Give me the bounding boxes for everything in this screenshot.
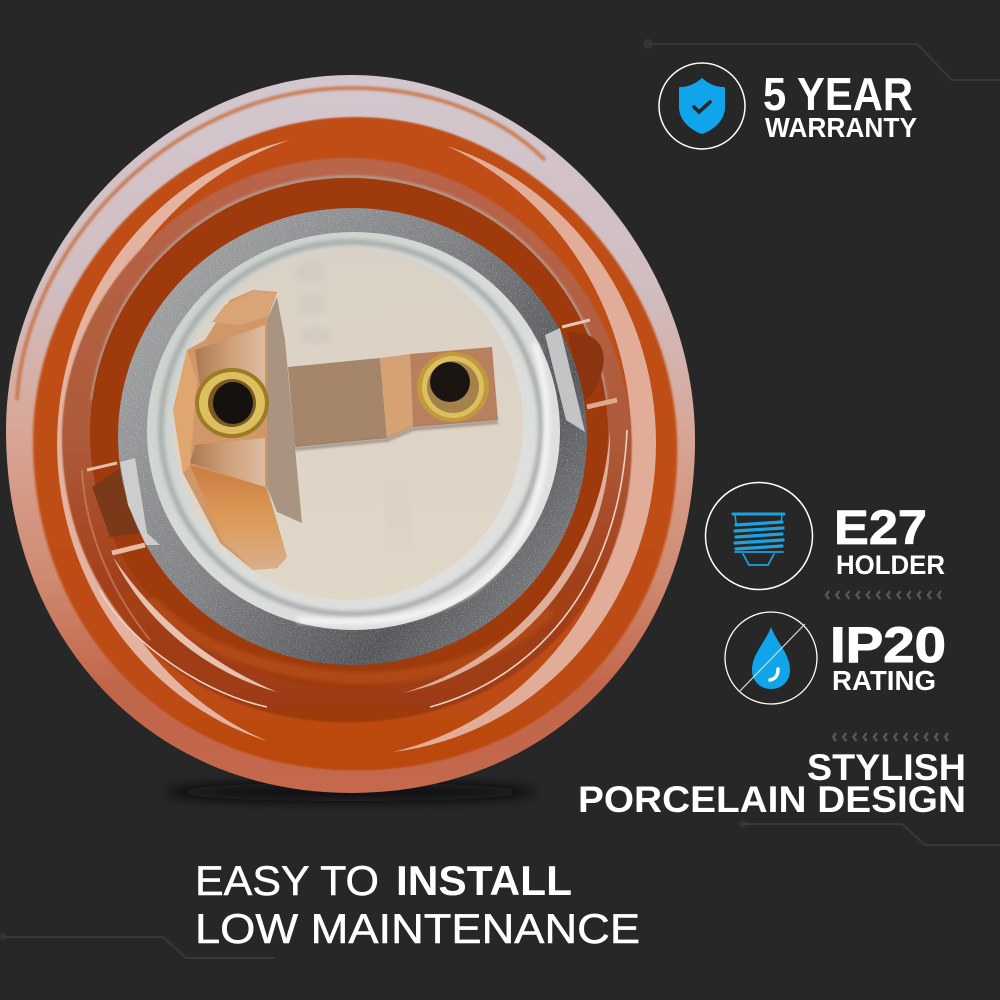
circuit line: top right [643,39,1000,80]
holder shadow [165,783,535,801]
install text: LOW MAINTENANCE [195,905,640,952]
right contact [288,347,498,449]
chevron divider [833,733,948,741]
E27 text: E27 [834,502,927,555]
porcelain body [6,75,695,793]
warranty text [763,68,917,143]
icon: shield in circle [659,63,745,149]
IP20 text [830,617,946,696]
icon: bulb base in circle [706,482,812,590]
porcelain notches [87,320,617,553]
icon: crossed water drop in circle [725,612,817,704]
chevron divider [826,591,941,599]
porcelain design text [578,747,966,820]
lamp holder photo [6,75,695,801]
porcelain design text: STYLISH [807,747,966,788]
warranty badge [659,63,917,149]
metal ring [118,208,587,665]
install text [195,857,640,952]
left contact [173,290,302,570]
install text: EASY TO [195,857,379,904]
embossed marks [294,261,410,550]
porcelain design text: PORCELAIN DESIGN [578,779,966,820]
warranty text: 5 YEAR [763,68,913,120]
circuit line: bottom left [0,934,275,958]
inner disc [173,248,523,600]
IP20 text: IP20 [830,617,946,673]
E27 text [834,502,945,580]
E27 text: HOLDER [836,550,945,580]
IP20 text: RATING [832,665,936,696]
warranty text: WARRANTY [765,112,917,143]
install text: INSTALL [396,857,572,904]
E27 holder badge [706,482,945,590]
IP20 badge [725,612,946,704]
circuit line: lower right [740,820,1000,845]
